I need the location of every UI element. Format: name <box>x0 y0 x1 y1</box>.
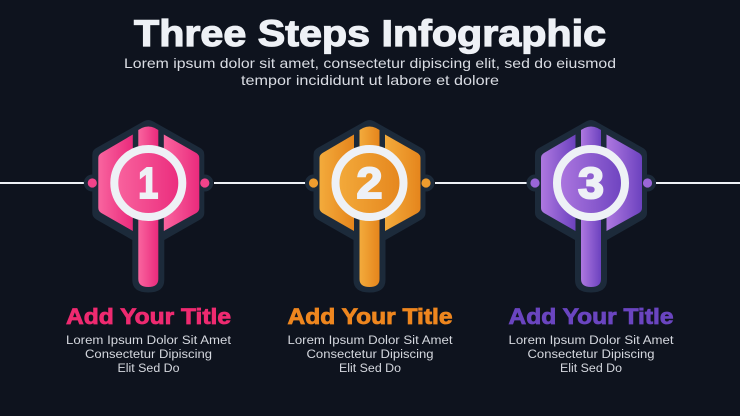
step 3 text <box>508 304 674 375</box>
connector line segments <box>0 182 740 184</box>
step 3 icon <box>526 120 656 292</box>
step 1 icon: 1 <box>138 159 158 208</box>
step 2 text: Lorem Ipsum Dolor Sit Amet <box>288 335 453 347</box>
subtitle: Lorem ipsum dolor sit amet, consectetur dipiscing elit, sed do eiusmod <box>124 55 616 71</box>
step 2 icon: 2 <box>356 159 382 208</box>
step 2 text <box>288 304 453 375</box>
title: Three Steps Infographic <box>134 13 606 54</box>
step 1 text: Lorem Ipsum Dolor Sit Amet <box>66 335 232 347</box>
step 1 text: Add Your Title <box>66 304 231 329</box>
step 2 text: Elit Sed Do <box>339 363 401 375</box>
step 1 text: Elit Sed Do <box>118 363 180 375</box>
step 3 text: Lorem Ipsum Dolor Sit Amet <box>508 335 674 347</box>
step 2 icon <box>305 120 434 292</box>
step 3 icon: 3 <box>578 159 604 208</box>
step 2 text: Add Your Title <box>288 304 452 329</box>
step 2 text: Consectetur Dipiscing <box>306 349 434 361</box>
step 3 text: Consectetur Dipiscing <box>528 349 654 361</box>
step 3 text: Add Your Title <box>508 304 674 329</box>
step 1 text: Consectetur Dipiscing <box>85 349 212 361</box>
step 3 text: Elit Sed Do <box>560 363 622 375</box>
step 1 text <box>66 304 232 375</box>
step 1 icon <box>84 120 213 292</box>
subtitle <box>124 55 616 88</box>
subtitle: tempor incididunt ut labore et dolore <box>241 72 499 88</box>
